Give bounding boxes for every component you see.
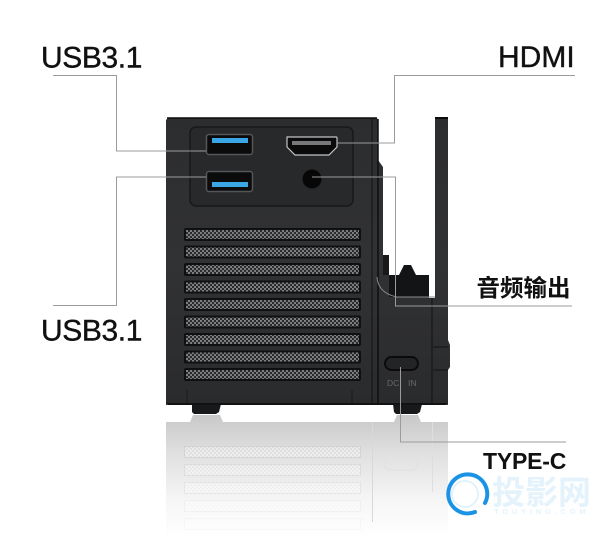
leader line: Type-C: [400, 367, 566, 442]
leader line: HDMI: [337, 76, 575, 143]
device body: IN: [408, 378, 416, 388]
DC IN label: DC: [387, 378, 399, 388]
label: USB3.1 top: USB3.1: [41, 42, 142, 74]
port panel: [190, 127, 353, 206]
reflection of device: [166, 415, 448, 538]
label: Type-C: TYPE-C: [483, 448, 566, 474]
rubber foot right: [393, 404, 422, 414]
label: USB3.1 bottom: USB3.1: [41, 314, 142, 348]
vent rows: [185, 229, 360, 380]
label: audio output: 音频输出: [476, 275, 570, 301]
watermark logo ring: [448, 474, 487, 513]
audio jack: [302, 170, 322, 188]
label: HDMI: HDMI: [498, 41, 575, 74]
device body: [166, 117, 450, 414]
leader line: USB bottom: [53, 177, 206, 306]
HDMI port: [287, 137, 337, 155]
USB port bottom: [206, 172, 252, 192]
cable clip: [389, 265, 429, 297]
DC IN port: [385, 357, 418, 370]
watermark: [448, 474, 591, 516]
rubber foot left: [192, 404, 221, 414]
USB port top: [206, 134, 252, 154]
main housing: [166, 117, 450, 405]
leader line: audio: [312, 177, 572, 306]
watermark name: 投影网: [492, 474, 591, 511]
leader line: USB top: [53, 76, 206, 151]
watermark url: TOUYING.COM: [494, 507, 589, 516]
side seam: [377, 119, 379, 403]
